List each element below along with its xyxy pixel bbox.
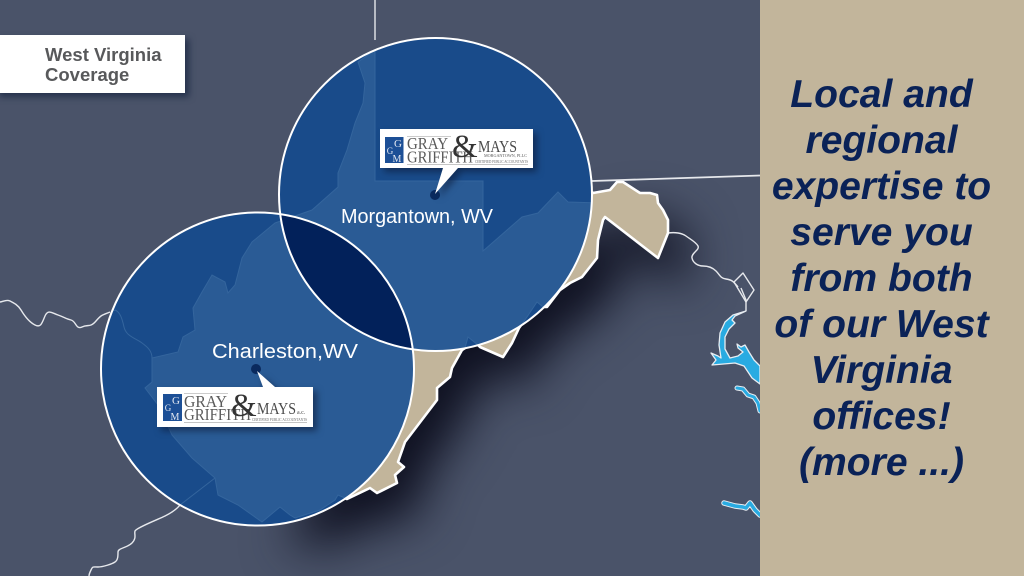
- coverage circles: [100, 37, 593, 526]
- city label: Charleston: Charleston,WV: [212, 341, 359, 363]
- side panel message: [772, 73, 991, 484]
- Charleston marker and logo callout: [157, 364, 313, 427]
- side panel message: regional: [805, 119, 959, 162]
- side panel message: (more ...): [799, 441, 964, 484]
- logo: G: [387, 146, 394, 156]
- logo: MORGANTOWN, PLLC: [484, 153, 527, 159]
- logo: G: [172, 395, 180, 407]
- logo: MAYS: [257, 399, 296, 418]
- logo: CERTIFIED PUBLIC ACCOUNTANTS: [475, 160, 528, 164]
- side panel message: Local and: [790, 73, 974, 116]
- logo: M: [171, 412, 180, 423]
- circle fill and state inside circles: [102, 39, 591, 524]
- overlap lens: [282, 215, 412, 348]
- logo: a.c.: [297, 410, 306, 416]
- logo: [163, 388, 307, 424]
- logo: &: [452, 129, 478, 165]
- logo: M: [393, 154, 402, 165]
- logo: GRIFFITH: [407, 148, 473, 166]
- side panel message: of our West: [774, 303, 991, 346]
- logo: GRAY: [184, 392, 227, 411]
- city label: Morgantown: Morgantown, WV: [341, 206, 494, 228]
- title label: West Virginia: [45, 44, 162, 65]
- logo: G: [165, 403, 172, 413]
- logo: GRAY: [407, 134, 448, 153]
- map background: [0, 0, 760, 576]
- title label: Coverage: [45, 64, 129, 85]
- river: James: [724, 503, 760, 515]
- callout pointer and logo card: [380, 129, 533, 194]
- side panel message: offices!: [812, 395, 951, 438]
- Morgantown circle outline: [279, 38, 592, 351]
- Morgantown marker and logo callout: [380, 129, 533, 200]
- side panel message: expertise to: [772, 165, 991, 208]
- logo: &: [231, 388, 257, 424]
- logo: G: [394, 138, 402, 150]
- logo: GRIFFITH: [184, 405, 251, 424]
- logo: CERTIFIED PUBLIC ACCOUNTANTS: [252, 418, 307, 422]
- map pin dot: [430, 190, 440, 200]
- river: Rappahannock: [737, 388, 760, 411]
- side panel message: serve you: [790, 211, 973, 254]
- side panel: [760, 0, 1024, 576]
- logo: MAYS: [478, 137, 517, 156]
- map pin dot: [251, 364, 261, 374]
- side panel message: from both: [790, 257, 973, 300]
- state of West Virginia: eastern tan portion: [295, 181, 668, 518]
- Charleston circle outline: [101, 212, 414, 526]
- state shadow: [284, 211, 690, 552]
- side panel message: Virginia: [811, 349, 952, 392]
- callout pointer and logo card: [157, 371, 313, 427]
- river: Potomac estuary: [711, 311, 760, 384]
- title label: [0, 35, 185, 93]
- state borders and rivers: thin lines: [0, 0, 760, 576]
- logo: [385, 129, 528, 166]
